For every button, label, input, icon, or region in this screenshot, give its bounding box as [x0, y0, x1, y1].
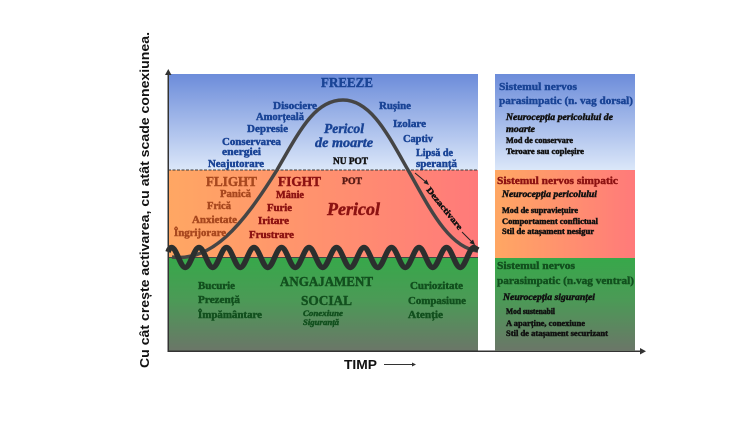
freeze zone labels: Captiv: [403, 134, 433, 145]
panel: sympathetic: Sistemul nervos simpatic: [497, 175, 618, 187]
freeze zone labels: Depresie: [247, 124, 289, 135]
freeze zone labels: Amorțeală: [256, 112, 304, 123]
x axis label: TIMP: [344, 357, 377, 372]
panel: dorsal parasympathetic: parasimpatic (n. vag dorsal): [499, 95, 633, 107]
panel: ventral parasympathetic: parasimpatic (n.vag ventral): [497, 275, 634, 287]
panel: sympathetic: Comportament conflictual: [502, 217, 599, 226]
social engagement zone labels: Curiozitate: [410, 281, 464, 292]
panel: dorsal parasympathetic: [495, 74, 635, 170]
flight zone labels: Frică: [207, 201, 231, 212]
freeze zone labels: speranță: [416, 159, 457, 170]
panel: sympathetic: Mod de supraviețuire: [502, 206, 578, 215]
freeze zone labels: Pericol: [324, 122, 364, 137]
social engagement zone labels: Compasiune: [408, 296, 467, 307]
panel: dorsal parasympathetic: moarte: [506, 124, 535, 134]
flight zone labels: Îngrijorare: [174, 227, 227, 239]
chart: regulation wave: [168, 248, 478, 268]
fight zone labels: FIGHT: [278, 175, 322, 190]
freeze zone labels: Rușine: [379, 101, 412, 112]
freeze zone labels: [208, 76, 457, 170]
fight zone labels: POT: [342, 177, 363, 187]
panel: dorsal parasympathetic: Sistemul nervos: [499, 81, 578, 93]
panel: ventral parasympathetic: Stil de atașament securizant: [506, 329, 608, 338]
panel: ventral parasympathetic: Mod sustenabil: [506, 307, 556, 316]
social engagement zone labels: Siguranță: [303, 318, 339, 327]
social engagement zone labels: Bucurie: [198, 281, 236, 292]
panel: ventral parasympathetic: [495, 258, 635, 351]
social engagement zone labels: SOCIAL: [301, 294, 352, 309]
axes: [165, 69, 646, 354]
flight zone labels: Anxietate: [192, 215, 238, 226]
fight zone labels: Mânie: [276, 190, 305, 201]
panel: dorsal parasympathetic: Mod de conservare: [506, 136, 573, 145]
panel: sympathetic: Neurocepția pericolului: [501, 189, 598, 199]
fight zone labels: Iritare: [258, 216, 290, 227]
panel: ventral parasympathetic: Sistemul nervos: [497, 260, 576, 272]
social engagement zone labels: Conexiune: [303, 309, 343, 318]
panel: sympathetic: [495, 170, 635, 258]
freeze zone labels: energiei: [222, 147, 261, 158]
freeze zone labels: Conservarea: [222, 137, 281, 148]
fight zone labels: Furie: [267, 203, 293, 214]
freeze zone labels: NU POT: [333, 157, 369, 167]
deactivation label and arrows: Dezactivare: [424, 185, 465, 232]
freeze zone labels: Lipsă de: [416, 148, 454, 159]
panel: ventral parasympathetic: Neurocepția siguranței: [502, 292, 596, 302]
social engagement zone labels: Prezență: [198, 295, 240, 306]
freeze zone labels: FREEZE: [321, 76, 373, 91]
social engagement zone labels: ANGAJAMENT: [280, 275, 374, 290]
social engagement zone labels: Împământare: [198, 309, 263, 321]
freeze zone labels: de moarte: [315, 136, 373, 151]
deactivation label and arrows: [415, 173, 475, 245]
freeze zone labels: Neajutorare: [208, 159, 265, 170]
panel: main chart zones: [168, 74, 478, 351]
social engagement zone labels: Atenție: [408, 310, 444, 321]
y axis label: Cu cât crește activarea, cu atât scade conexiunea.: [137, 32, 152, 368]
panel: dorsal parasympathetic: Teroare sau copleșire: [506, 147, 584, 156]
chart: activation bell curve: [172, 100, 478, 257]
flight zone labels: FLIGHT: [206, 175, 258, 190]
flight zone labels: [174, 175, 258, 239]
fight zone labels: Pericol: [326, 199, 380, 219]
panel: sympathetic: Stil de atașament nesigur: [502, 227, 594, 236]
fight zone labels: [249, 175, 380, 241]
freeze zone labels: Disociere: [273, 101, 318, 112]
x axis label: [344, 357, 416, 372]
panel: dorsal parasympathetic: Neurocepția pericolului de: [505, 112, 613, 122]
flight zone labels: Panică: [220, 189, 251, 200]
freeze zone labels: Izolare: [393, 119, 427, 130]
panel: ventral parasympathetic: A aparține, conexiune: [506, 319, 585, 328]
social engagement zone labels: [198, 275, 467, 327]
fight zone labels: Frustrare: [249, 230, 295, 241]
